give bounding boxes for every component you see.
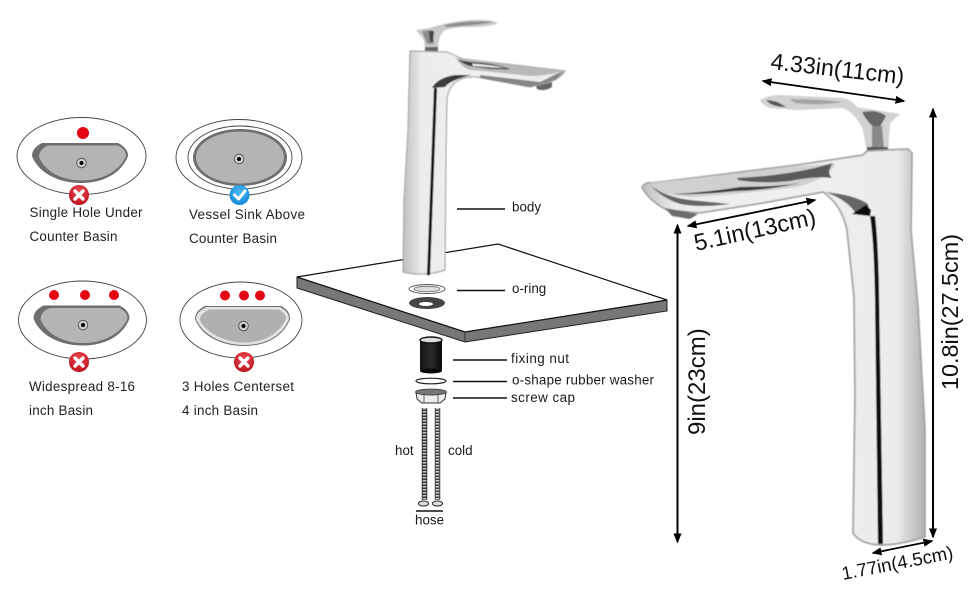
panel: 3 holes centerset basin	[180, 282, 302, 418]
label: screw cap	[453, 390, 575, 405]
spout highlights	[456, 58, 560, 76]
dimensioned faucet	[642, 95, 925, 545]
panel: widespread basin	[18, 281, 146, 418]
label: body	[457, 200, 541, 214]
hot hose	[418, 408, 428, 506]
label: fixing nut	[453, 351, 569, 366]
basin diagram: centerset	[180, 282, 302, 358]
panel: single hole under counter basin	[17, 118, 146, 244]
caption: widespread basin: inch Basin	[29, 403, 93, 418]
caption: vessel sink above counter basin: Vessel Sink Above	[189, 207, 305, 222]
faucet body and spout	[642, 149, 925, 545]
icon: check badge	[230, 185, 250, 205]
caption: vessel sink above counter basin: Counter Basin	[189, 231, 277, 246]
screw cap	[416, 389, 446, 403]
label: hot: hot	[395, 443, 414, 458]
handle	[760, 95, 900, 153]
label: screw cap: screw cap	[511, 390, 575, 405]
icon: cross badge	[69, 352, 89, 372]
dimension: handle width: 4.33in(11cm)	[769, 48, 906, 89]
basin diagram: single hole	[17, 118, 146, 194]
icon: cross badge	[69, 185, 89, 205]
icon: cross badge	[234, 352, 254, 372]
basin diagram: widespread	[18, 281, 146, 359]
label: cold: cold	[448, 443, 473, 458]
caption: widespread basin: Widespread 8-16	[29, 379, 135, 394]
dimension: spout height: 9in(23cm)	[684, 328, 711, 435]
dimension: base diameter: 1.77in(4.5cm)	[840, 542, 955, 584]
center black reflection	[427, 88, 437, 275]
label: hose: hose	[415, 512, 444, 528]
dimension: spout reach: 5.1in(13cm)	[691, 204, 818, 256]
panel: vessel sink above counter basin	[176, 120, 305, 246]
caption: 3 holes centerset basin: 3 Holes Centerset	[182, 379, 294, 394]
label: body: body	[512, 200, 541, 214]
countertop slab	[297, 244, 667, 342]
caption: single hole under counter basin: Counter Basin	[30, 229, 118, 244]
basin diagram: vessel sink	[176, 120, 302, 196]
handle	[416, 20, 498, 52]
label: fixing nut: fixing nut	[511, 351, 569, 366]
label: o-shape rubber washer: o-shape rubber washer	[512, 372, 655, 388]
label: o-ring: o-ring	[512, 281, 546, 296]
spout reflections	[650, 164, 836, 197]
o-ring	[409, 284, 445, 294]
o-shape rubber washer	[416, 378, 446, 384]
cold hose	[432, 408, 442, 506]
caption: single hole under counter basin: Single Hole Under	[30, 205, 143, 220]
center black reflection	[870, 216, 883, 544]
label: o-ring	[457, 281, 546, 296]
faucet column and spout	[403, 51, 565, 274]
fixing nut	[420, 337, 442, 374]
exploded faucet body	[403, 20, 565, 275]
caption: 3 holes centerset basin: 4 inch Basin	[182, 403, 258, 418]
rubber gasket	[409, 297, 445, 309]
dimension: total height: 10.8in(27.5cm)	[937, 234, 963, 390]
